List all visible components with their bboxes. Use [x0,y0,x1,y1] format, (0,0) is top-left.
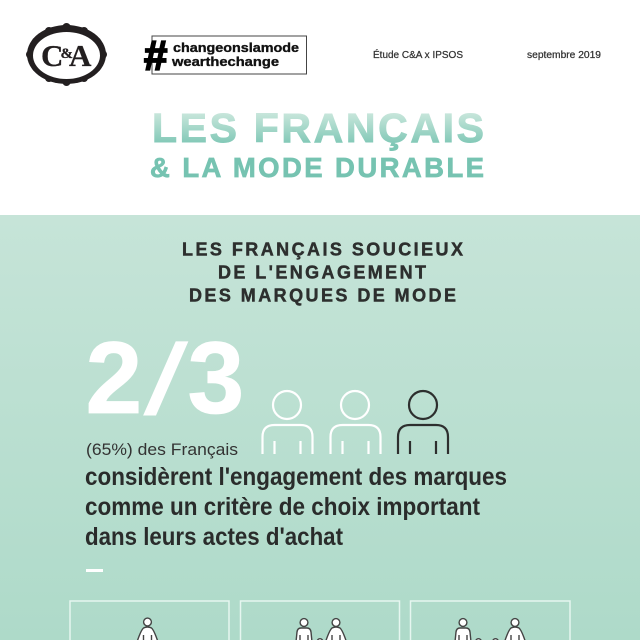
study label: Étude C&A x IPSOS [373,48,463,61]
hashtag badge [144,32,306,79]
icon: person white 1 [262,391,312,454]
icon: family of four [455,619,526,640]
key statement: comme un critère de choix important [85,493,481,521]
icon: person white 2 [330,391,380,454]
section heading: LES FRANÇAIS SOUCIEUX [182,240,463,260]
panel: card couple with two children [410,601,570,640]
big stat: 2/3: / [138,325,193,435]
section heading: DE L'ENGAGEMENT [218,262,426,282]
title: & LA MODE DURABLE [150,152,484,183]
section heading: DES MARQUES DE MODE [189,286,456,306]
logo: C&A: A [69,38,92,73]
big stat: 2/3: 2 [86,321,142,435]
title: LES FRANÇAIS [152,105,484,151]
hashtag badge: changeonslamode [173,40,299,55]
logo: C&A [26,23,107,86]
panel: card single [70,601,229,640]
key statement: dans leurs actes d'achat [85,523,344,551]
date: septembre 2019 [527,50,601,61]
hashtag badge: wearthechange [171,54,279,69]
icon: person dark [398,391,448,454]
icon: woman [137,618,158,640]
panel: survey background [0,215,640,640]
section heading [182,240,463,306]
key statement: considèrent l'engagement des marques [85,463,507,491]
stat label: (65%) des Français [86,440,238,459]
panel: card couple with child [240,601,400,640]
icon: family of three [296,619,346,640]
title [150,105,484,183]
dash [86,569,103,572]
big stat: 2/3 [86,321,244,435]
key statement [85,463,507,551]
logo: C&A: C [41,38,63,73]
hashtag badge: # [144,32,167,79]
big stat: 2/3: 3 [188,321,244,435]
logo: C&A: & [60,46,73,62]
